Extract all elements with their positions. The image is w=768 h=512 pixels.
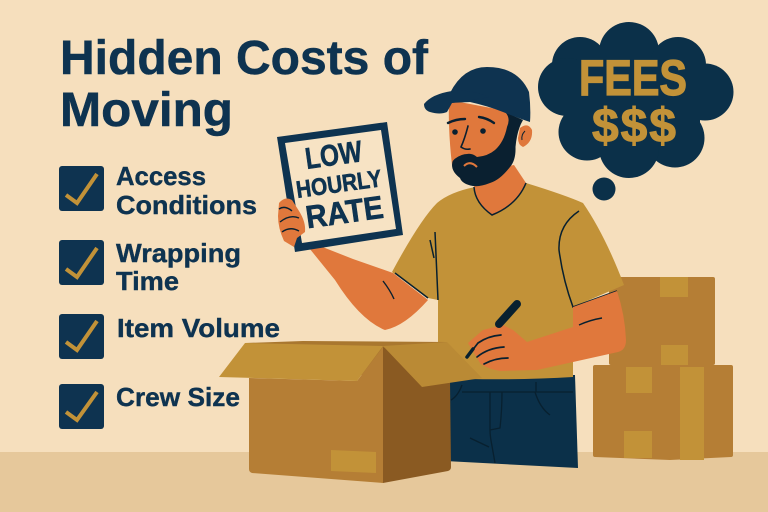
neck <box>474 165 526 216</box>
mouth <box>464 163 477 167</box>
box right flap <box>383 342 482 387</box>
title: Moving <box>60 83 233 137</box>
face <box>449 100 515 185</box>
thought bubble <box>538 22 734 200</box>
nose <box>461 126 470 149</box>
sign <box>277 122 403 252</box>
checklist item: item volume: Item Volume <box>117 313 280 343</box>
open cardboard box <box>219 341 482 483</box>
checklist item: wrapping time: Wrapping <box>116 238 241 268</box>
sign: RATE <box>303 189 386 235</box>
sign: LOW <box>303 135 365 176</box>
checklist item: access conditions: Conditions <box>116 190 257 220</box>
checklist item: crew size: Crew Size <box>116 382 240 412</box>
trousers <box>445 375 578 468</box>
checklist item: access conditions: Access <box>116 161 206 191</box>
checklist item: wrapping time <box>59 238 241 296</box>
floor <box>0 452 768 512</box>
cap <box>424 67 530 122</box>
pen <box>467 304 517 364</box>
box label <box>331 450 376 473</box>
left forearm <box>301 238 428 330</box>
person <box>277 67 626 468</box>
title: Hidden Costs of <box>60 31 429 85</box>
box side face <box>383 347 451 483</box>
collar <box>474 183 526 215</box>
shirt <box>392 183 624 379</box>
box back flap <box>245 341 447 375</box>
box front face <box>249 347 383 483</box>
bubble text: fees: FEES <box>579 50 687 106</box>
beard <box>452 112 523 186</box>
checklist item: wrapping time: Time <box>116 266 179 296</box>
upper box <box>609 277 715 365</box>
box left flap <box>219 343 383 381</box>
lower box <box>593 365 733 460</box>
title <box>60 31 429 137</box>
ear <box>518 125 532 147</box>
right arm and hand <box>383 281 626 371</box>
checklist <box>59 161 280 429</box>
checklist item: item volume <box>59 313 280 359</box>
sign: HOURLY <box>294 165 383 204</box>
bubble text: dollar signs: $$$ <box>592 100 676 153</box>
left hand <box>278 199 305 247</box>
head <box>424 67 532 186</box>
stacked boxes <box>593 277 733 460</box>
checklist item: crew size <box>59 382 240 429</box>
checklist item: access conditions <box>59 161 257 220</box>
eyes and brows <box>448 117 494 135</box>
